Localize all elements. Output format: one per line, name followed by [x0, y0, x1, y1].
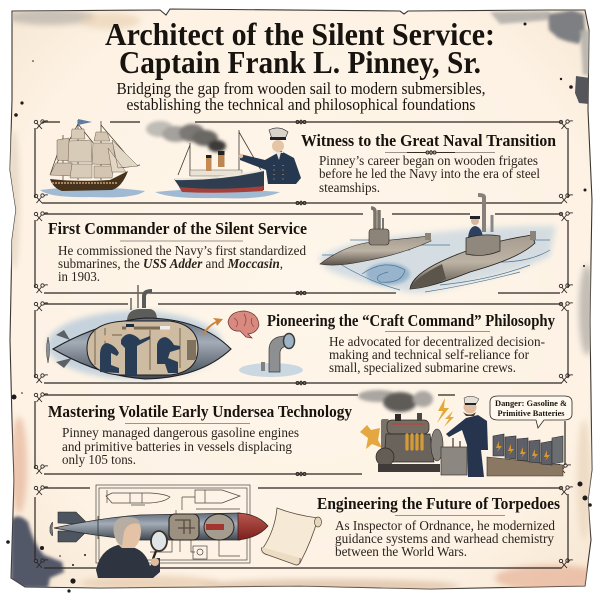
body text: submarines, the USS Adder and Moccasin, [58, 256, 283, 271]
body text: Pinney managed dangerous gasoline engines [62, 425, 299, 440]
icon: engine smoke [358, 390, 433, 412]
crew figure: standing centre [121, 324, 150, 375]
divider [407, 150, 455, 154]
body text: As Inspector of Ordnance, he modernized [335, 518, 555, 533]
icon: cutaway submarine [46, 285, 231, 379]
body text: making and technical self-reliance for [329, 347, 530, 362]
icon: control box [441, 438, 467, 475]
body text: and primitive batteries in vessels displacing [62, 439, 292, 454]
icon: sailing ship [40, 119, 145, 197]
panel frame [34, 302, 573, 385]
body text: small, specialized submarine crews. [329, 360, 516, 375]
icon: inspector with magnifier [96, 517, 167, 578]
divider line [385, 152, 495, 154]
body text: in 1903. [58, 269, 100, 284]
heading: First Commander of the Silent Service [48, 219, 307, 238]
icon: brain [228, 311, 259, 338]
subtitle: Bridging the gap from wooden sail to modern submersibles, [116, 79, 486, 98]
heading: Witness to the Great Naval Transition [301, 131, 556, 150]
panel: torpedoes [34, 485, 573, 578]
icon: officer in tower [468, 216, 483, 238]
body text [319, 153, 540, 195]
heading: Pioneering the “Craft Command” Philosophy [267, 311, 556, 330]
callout: danger bubble: Primitive Batteries [498, 409, 565, 418]
icon: steamship [155, 130, 280, 198]
icon: arrow [202, 318, 223, 335]
subtitle [116, 79, 486, 114]
icon: periscope in water [239, 334, 303, 377]
subtitle: establishing the technical and philosophical foundations [126, 95, 476, 114]
icon: lightning bolts [437, 398, 454, 427]
panel: volatile technology [34, 390, 572, 477]
icon: officer with engine [446, 396, 488, 477]
body text: before he led the Navy into the era of steel [319, 166, 540, 181]
body text [58, 243, 306, 284]
title: Captain Frank L. Pinney, Sr. [119, 44, 481, 80]
icon: naval officer [239, 128, 301, 184]
icon: gasoline engine [360, 413, 443, 472]
body text: He advocated for decentralized decision- [329, 334, 545, 349]
panel frame [34, 486, 573, 568]
body text: guidance systems and warhead chemistry [335, 531, 554, 546]
icon: scroll [262, 508, 322, 565]
icon: smoke plume [146, 121, 226, 152]
title: Architect of the Silent Service: [105, 16, 495, 52]
body text [335, 518, 555, 559]
body text: steamships. [319, 180, 380, 195]
icon: front submarine [410, 195, 536, 289]
icon: blueprint [96, 485, 250, 563]
icon: batteries [487, 434, 563, 476]
panel frame [34, 120, 573, 205]
callout: danger bubble [490, 396, 572, 428]
crew figure: seated right [157, 326, 180, 373]
body text: Pinney’s career began on wooden frigates [319, 153, 538, 168]
callout: danger bubble: Danger: Gasoline & [495, 399, 567, 408]
icon: torpedo [50, 512, 268, 542]
icon: rear submarine [320, 208, 431, 265]
body text: He commissioned the Navy’s first standardized [58, 243, 306, 258]
divider [385, 330, 490, 332]
heading: Mastering Volatile Early Undersea Technology [48, 402, 353, 421]
divider [395, 514, 505, 516]
body text [329, 334, 545, 375]
panel: naval transition [34, 119, 573, 205]
panel frame [34, 393, 571, 476]
body text: between the World Wars. [335, 544, 467, 559]
crew figure: seated left [100, 334, 119, 373]
body text: only 105 tons. [62, 452, 136, 467]
panel frame [34, 212, 573, 295]
panel: craft command [34, 285, 573, 385]
icon: water [318, 226, 556, 293]
body text [62, 425, 299, 467]
divider [125, 422, 250, 424]
panel: first commander [34, 195, 573, 295]
heading: Engineering the Future of Torpedoes [317, 494, 561, 513]
divider [120, 240, 243, 242]
title [105, 16, 495, 80]
